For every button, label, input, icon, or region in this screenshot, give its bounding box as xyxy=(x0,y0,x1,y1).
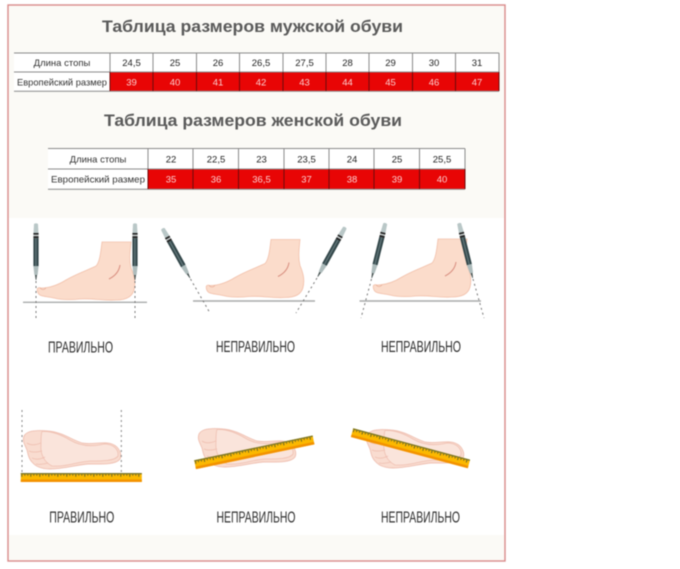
label: wrong: НЕПРАВИЛЬНО xyxy=(381,510,460,526)
label: wrong: НЕПРАВИЛЬНО xyxy=(381,339,461,356)
table: men's sizes: 39 xyxy=(126,78,137,88)
table: men's sizes: 26 xyxy=(213,58,223,69)
table: women's sizes: 39 xyxy=(392,174,402,186)
table: men's sizes: 30 xyxy=(429,58,439,69)
illustration: side view, wrong, pens leaning inward xyxy=(360,222,484,318)
table: women's sizes: 38 xyxy=(347,174,357,186)
table: women's sizes: 22,5 xyxy=(207,154,225,166)
illustration: sole view, wrong, ruler tilted down xyxy=(351,428,470,468)
title: men's shoe sizes: Таблица размеров мужской обуви xyxy=(102,17,403,36)
table: men's sizes: 47 xyxy=(472,78,482,88)
table: men's sizes: 43 xyxy=(299,78,310,88)
label: wrong: НЕПРАВИЛЬНО xyxy=(216,339,295,356)
table: women's sizes: 23,5 xyxy=(297,154,316,166)
illustration: sole view, wrong, ruler tilted up xyxy=(194,429,314,469)
illustration: side view, correct xyxy=(23,223,147,321)
table: men's sizes: 27,5 xyxy=(295,58,314,69)
table: women's sizes: Длина стопы xyxy=(70,154,127,166)
title: women's shoe sizes: Таблица размеров женской обуви xyxy=(104,111,402,130)
table: women's sizes: 23 xyxy=(256,154,267,166)
table: women's sizes: 40 xyxy=(437,174,447,186)
table: men's sizes: 29 xyxy=(385,58,396,69)
label: correct: ПРАВИЛЬНО xyxy=(49,509,114,526)
table: women's sizes: 22 xyxy=(166,154,176,166)
table: women's sizes: Европейский размер xyxy=(51,174,145,186)
table: men's sizes: 40 xyxy=(170,78,180,88)
table: women's sizes: 36 xyxy=(211,174,221,186)
illustration: sole view, correct xyxy=(21,410,142,482)
table: women's sizes: 25,5 xyxy=(433,154,451,166)
table: men's sizes: 45 xyxy=(385,78,396,88)
white illustration area xyxy=(9,218,504,535)
table: men's sizes: 25 xyxy=(170,58,180,69)
table: women's sizes: 36,5 xyxy=(252,174,271,186)
label: correct: ПРАВИЛЬНО xyxy=(48,340,113,356)
illustration: side view, wrong, pens leaning outward xyxy=(160,226,347,313)
table: men's sizes: Европейский размер xyxy=(17,78,107,88)
page background frame xyxy=(8,5,505,561)
table: women's sizes xyxy=(48,148,465,189)
table: men's sizes: 28 xyxy=(342,58,353,69)
label: wrong: НЕПРАВИЛЬНО xyxy=(216,509,296,526)
table: men's sizes: 46 xyxy=(429,78,439,88)
table: women's sizes: 35 xyxy=(166,174,176,186)
table: women's sizes: 24 xyxy=(347,154,357,166)
table: men's sizes: 41 xyxy=(213,78,223,88)
table: men's sizes: 26,5 xyxy=(252,58,270,69)
table: women's sizes: 25 xyxy=(392,154,402,166)
table: women's sizes: 37 xyxy=(301,174,312,186)
table: men's sizes: 24,5 xyxy=(122,58,141,69)
table: men's sizes xyxy=(14,53,499,91)
table: men's sizes: 42 xyxy=(256,78,266,88)
table: men's sizes: 31 xyxy=(472,58,482,69)
table: men's sizes: 44 xyxy=(342,78,353,88)
table: men's sizes: Длина стопы xyxy=(34,58,91,69)
